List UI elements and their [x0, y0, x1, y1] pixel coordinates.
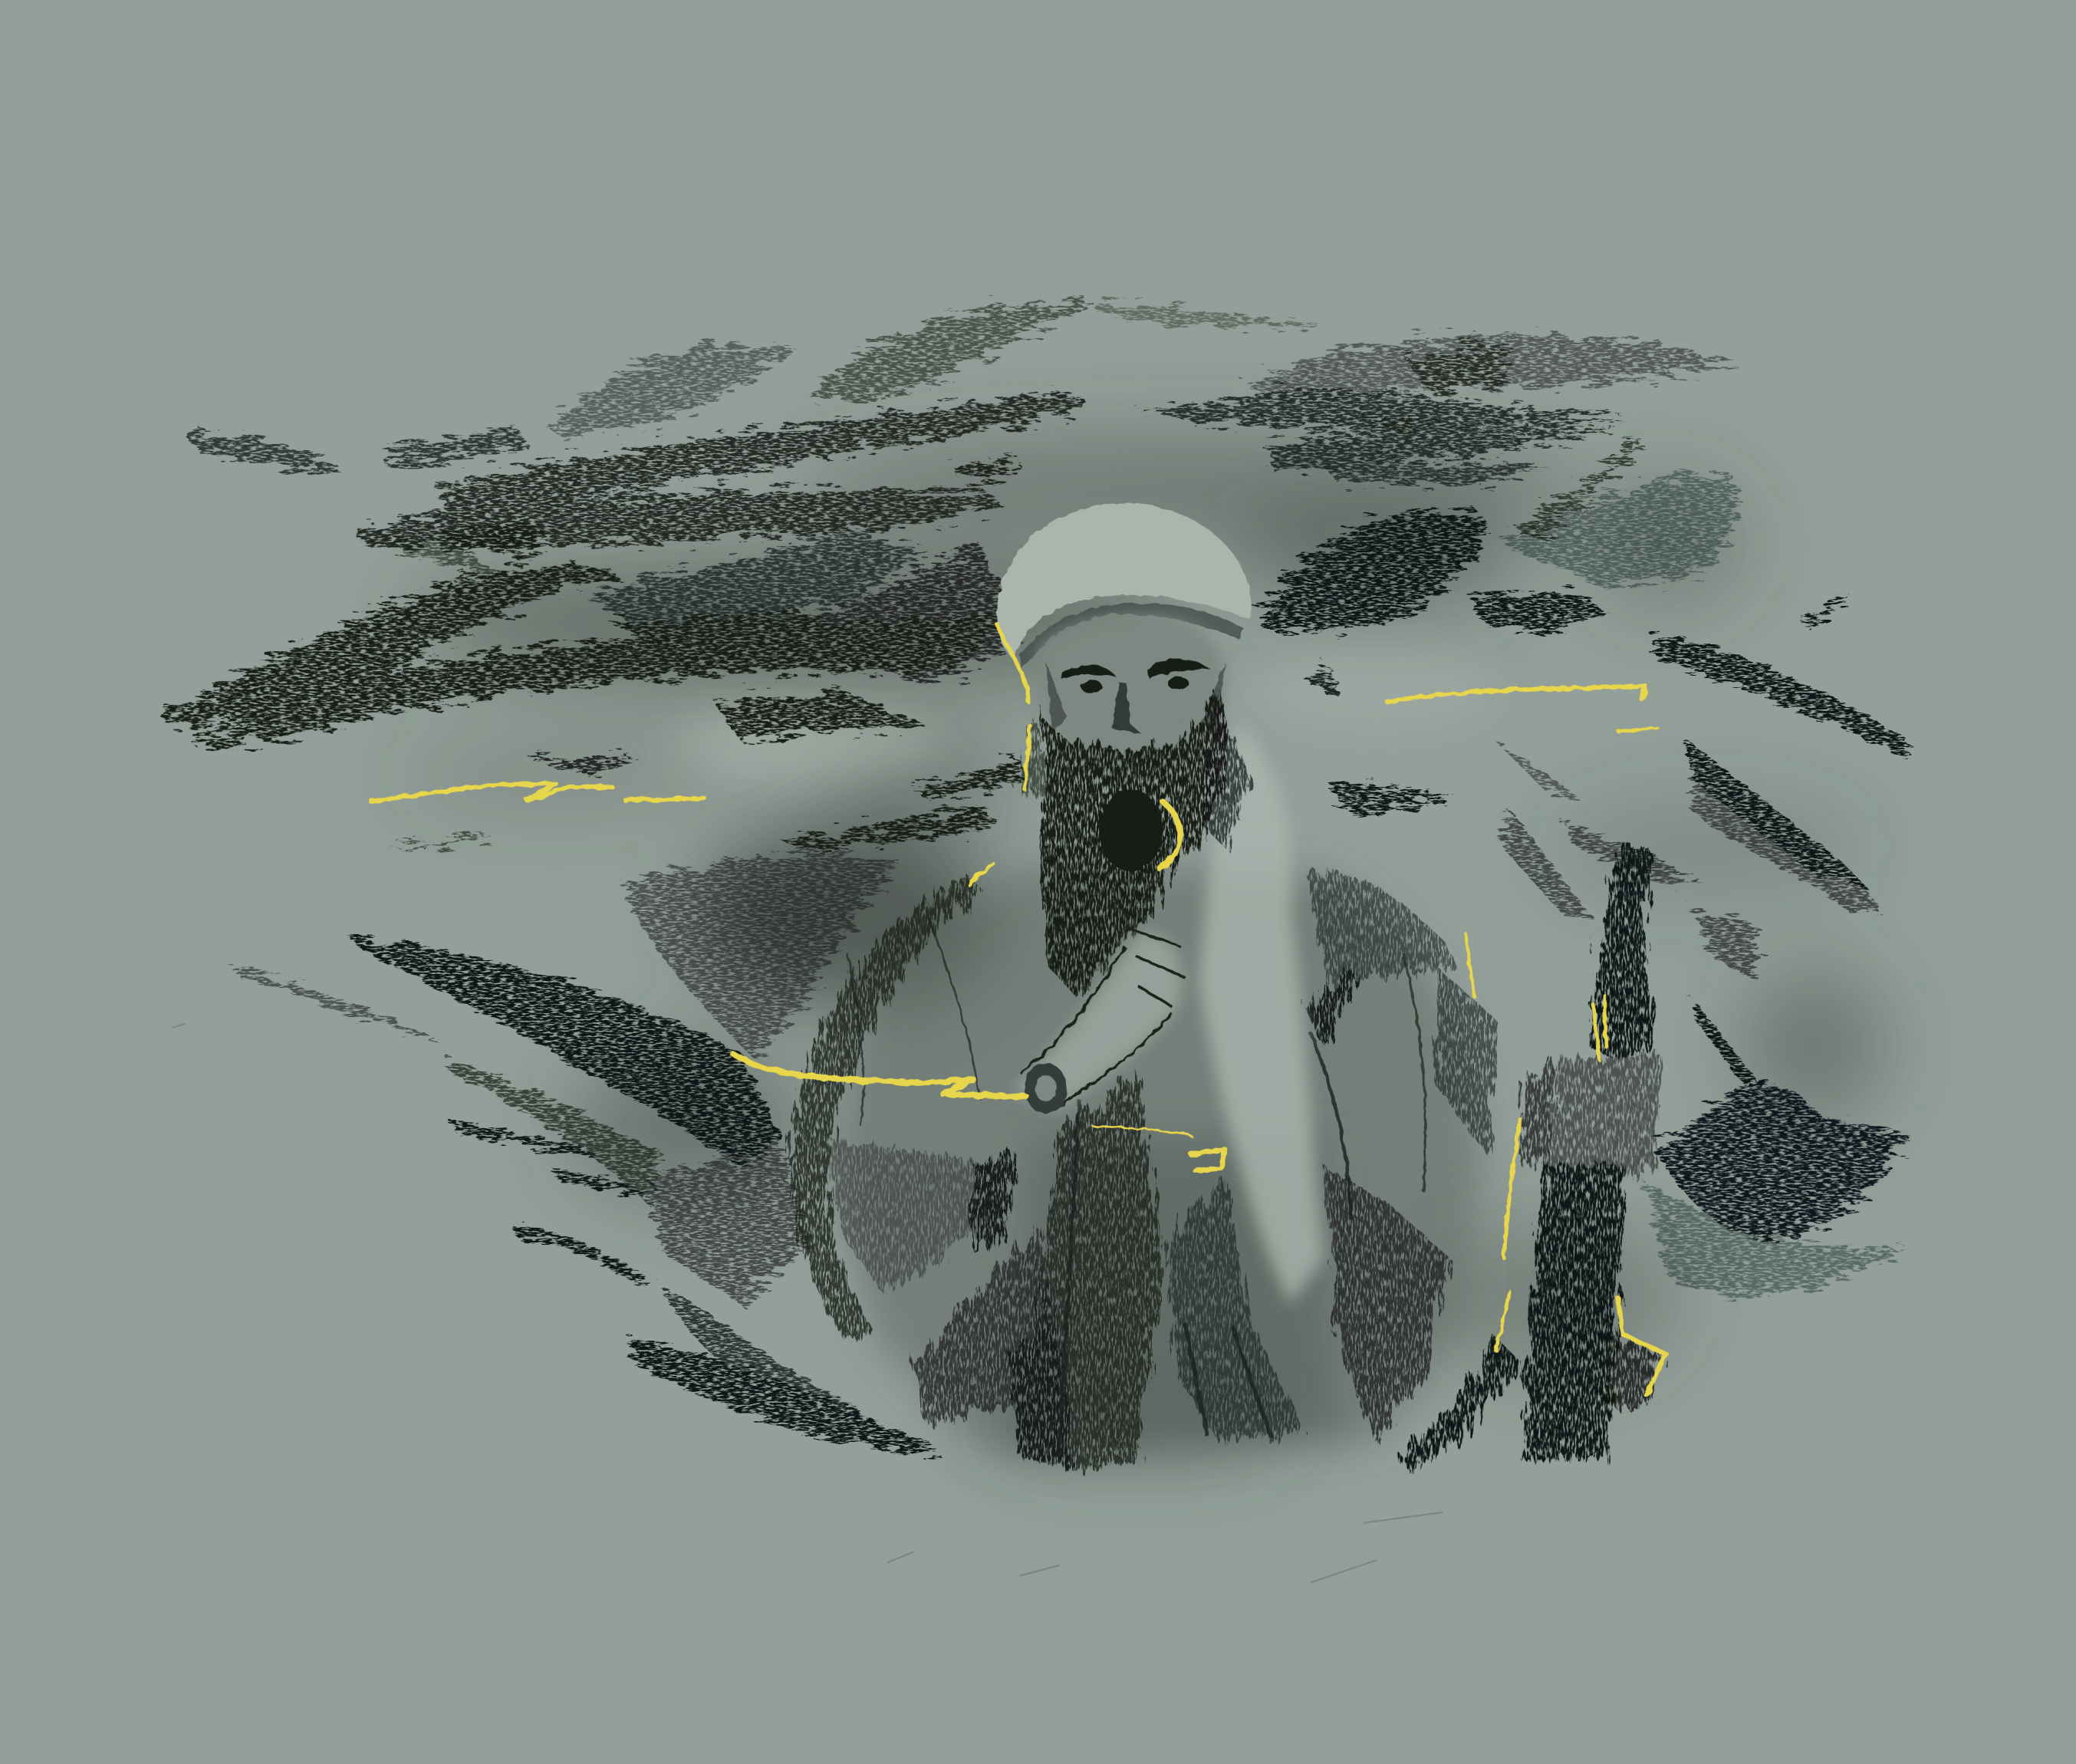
yellow stroke: left horizon [370, 784, 612, 801]
yellow chalk accents [370, 623, 1666, 1396]
yellow stroke: rifle barrel [1593, 996, 1606, 1059]
yellow stroke: collar [969, 864, 993, 884]
rifle [1401, 847, 1662, 1470]
charcoal strokes: sky and distant ridges [188, 301, 1735, 548]
figure: hand at chest [1013, 927, 1185, 1114]
yellow stroke: sleeve [732, 1053, 1026, 1097]
yellow stroke: rifle grip [1496, 1291, 1509, 1351]
yellow stroke: rifle body [1504, 1119, 1520, 1258]
yellow stroke: right horizon [1387, 686, 1646, 702]
figure: face [1039, 616, 1225, 782]
figure: robe and torso [791, 861, 1496, 1470]
figure: beard [1019, 689, 1251, 1000]
charcoal strokes: right hillside and cave shadow [1258, 437, 1917, 1086]
charcoal strokes: lower left mass [232, 854, 937, 1454]
watch on wrist [1025, 1064, 1067, 1114]
smudged tonal wash behind the scene [397, 434, 1887, 1460]
yellow stroke: microphone ring [1160, 801, 1180, 869]
charcoal strokes: lower right mass [1642, 1084, 1912, 1295]
yellow stroke: turban edge [995, 623, 1028, 702]
yellow stroke: right shoulder [1466, 933, 1473, 996]
yellow stroke: rifle stock [1618, 1298, 1666, 1396]
yellow stroke: beard edge [1025, 726, 1030, 789]
figure: long light scarf [1198, 722, 1324, 1305]
charcoal strokes: left hillside [162, 525, 1026, 853]
yellow stroke: chest line [1092, 1126, 1192, 1136]
yellow stroke: left dash [625, 798, 704, 800]
yellow stroke: chest mark [1192, 1150, 1225, 1170]
figure: turban [995, 502, 1252, 669]
figure: microphone [1099, 789, 1163, 871]
faint stray marks below the drawing [172, 1024, 1443, 1582]
yellow stroke: right dash [1618, 729, 1657, 731]
